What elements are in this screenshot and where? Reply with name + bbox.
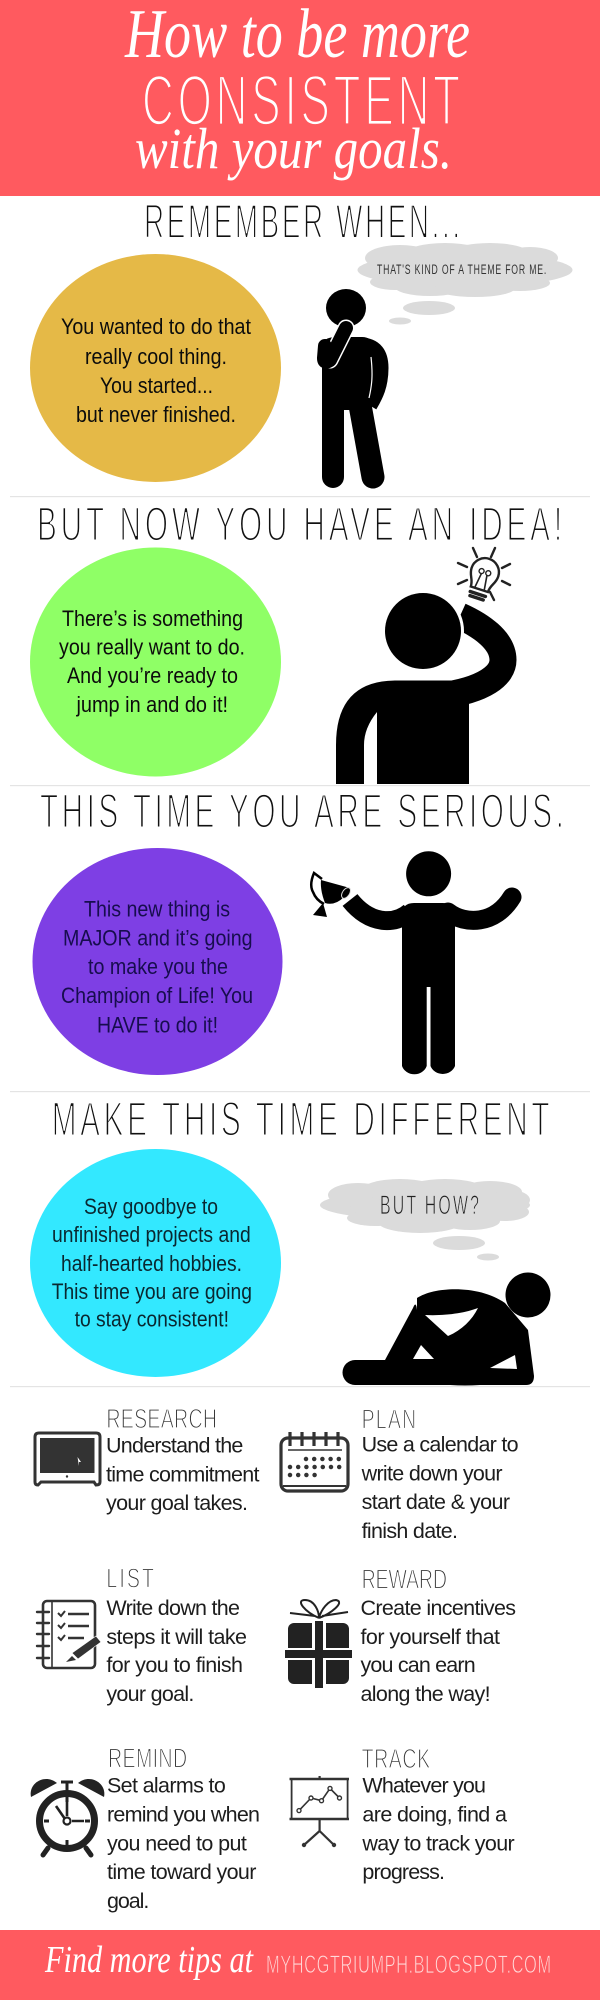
label: research: RESEARCH	[106, 1404, 217, 1435]
text: track: Whatever you	[362, 1774, 486, 1798]
panel: remember when circle	[30, 254, 281, 482]
circle text: You wanted to do that	[61, 314, 251, 339]
icon: monitor	[35, 1433, 100, 1485]
text: remind: time toward your	[107, 1860, 256, 1884]
text: track	[361, 1774, 515, 1884]
heading: remember when: REMEMBER WHEN...	[144, 195, 460, 249]
title line: consistent: CONSISTENT	[142, 61, 460, 141]
text: list: steps it will take	[106, 1625, 247, 1649]
circle text: And you’re ready to	[67, 663, 238, 688]
circle text: This new thing is	[84, 897, 230, 922]
panel: footer banner	[0, 1930, 600, 2000]
panel: idea circle	[30, 548, 281, 776]
panel: remind	[31, 1743, 260, 1913]
text: track: are doing, find a	[362, 1803, 507, 1827]
figure: person with idea	[336, 590, 503, 784]
title line: with your goals: with your goals.	[135, 116, 452, 181]
circle text	[59, 606, 245, 717]
label: track: TRACK	[362, 1744, 430, 1775]
circle text: unfinished projects and	[52, 1222, 251, 1247]
icon: presentation board	[290, 1776, 349, 1847]
text: remind: Set alarms to	[107, 1774, 226, 1798]
circle text: half-hearted hobbies.	[61, 1251, 242, 1276]
text: list	[106, 1596, 247, 1706]
circle text	[61, 897, 253, 1038]
text: remind	[107, 1774, 260, 1913]
circle text	[52, 1194, 252, 1332]
figure: person with trophy	[350, 851, 512, 1074]
text: research	[106, 1433, 260, 1515]
text: remind: you need to put	[107, 1831, 247, 1855]
label: remind: REMIND	[108, 1743, 187, 1774]
text: research: time commitment	[106, 1462, 260, 1486]
circle text: This time you are going	[52, 1279, 252, 1304]
text: list: for you to finish	[106, 1653, 243, 1677]
text: plan	[361, 1433, 519, 1543]
circle text: Champion of Life! You	[61, 983, 253, 1008]
panel: track	[290, 1744, 515, 1884]
heading: make this time different: MAKE THIS TIME DIFFERENT	[52, 1094, 550, 1147]
text: reward: Create incentives	[360, 1596, 516, 1620]
text: reward: you can earn	[360, 1653, 476, 1677]
panel: different circle	[30, 1149, 281, 1377]
icon: checklist and pencil	[37, 1601, 101, 1668]
text: research: your goal takes.	[106, 1491, 248, 1515]
thought cloud: but how	[320, 1179, 530, 1260]
circle text: There’s is something	[62, 606, 243, 631]
text: research: Understand the	[106, 1433, 243, 1457]
panel: header banner	[0, 0, 600, 196]
circle text: jump in and do it!	[76, 692, 228, 717]
circle text: to stay consistent!	[75, 1307, 229, 1332]
text: plan: start date & your	[362, 1490, 510, 1514]
text: remind: remind you when	[107, 1803, 260, 1827]
text: plan: write down your	[361, 1461, 503, 1485]
label: reward: REWARD	[362, 1564, 447, 1596]
label: plan: PLAN	[362, 1404, 416, 1436]
icon: light bulb	[458, 548, 510, 602]
circle text: to make you the	[88, 954, 228, 979]
circle text: but never finished.	[76, 402, 236, 427]
text: track: way to track your	[361, 1831, 515, 1855]
panel: serious circle	[32, 848, 282, 1075]
cloud text: THAT'S KIND OF A THEME FOR ME.	[377, 262, 546, 278]
text: list: Write down the	[106, 1596, 240, 1620]
figure: reclining person	[342, 1272, 550, 1386]
text: track: progress.	[362, 1860, 445, 1884]
circle text: HAVE to do it!	[97, 1013, 218, 1038]
figure: thinking person	[322, 289, 380, 477]
icon: calendar	[281, 1432, 348, 1491]
text: remind: goal.	[107, 1889, 149, 1913]
icon: alarm clock	[31, 1779, 104, 1855]
circle text: you really want to do.	[59, 635, 245, 660]
icon: trophy	[311, 873, 352, 917]
panel: research	[35, 1404, 260, 1515]
panel: plan	[281, 1404, 519, 1543]
panel: reward	[285, 1564, 516, 1706]
text: reward: for yourself that	[360, 1625, 500, 1649]
circle text: You started...	[100, 373, 213, 398]
text: reward: along the way!	[360, 1682, 491, 1706]
circle text: Say goodbye to	[84, 1194, 218, 1219]
footer script text: Find more tips at	[44, 1939, 254, 1981]
text: list: your goal.	[106, 1682, 194, 1706]
heading: this time you are serious: THIS TIME YOU ARE SERIOUS.	[40, 785, 564, 838]
label: list: LIST	[106, 1563, 154, 1594]
circle text	[61, 314, 251, 427]
circle text: really cool thing.	[85, 344, 227, 369]
circle text: MAJOR and it’s going	[63, 925, 253, 950]
text: plan: Use a calendar to	[362, 1433, 519, 1457]
panel: list	[37, 1563, 247, 1706]
thought cloud: theme for me	[358, 243, 572, 324]
cloud text: BUT HOW?	[380, 1190, 479, 1220]
text: reward	[360, 1596, 516, 1706]
icon: gift box	[285, 1600, 353, 1688]
footer url: MYHCGTRIUMPH.BLOGSPOT.COM	[266, 1952, 551, 1979]
heading: but now you have an idea: BUT NOW YOU HAVE AN IDEA!	[37, 498, 562, 551]
text: plan: finish date.	[362, 1519, 458, 1543]
